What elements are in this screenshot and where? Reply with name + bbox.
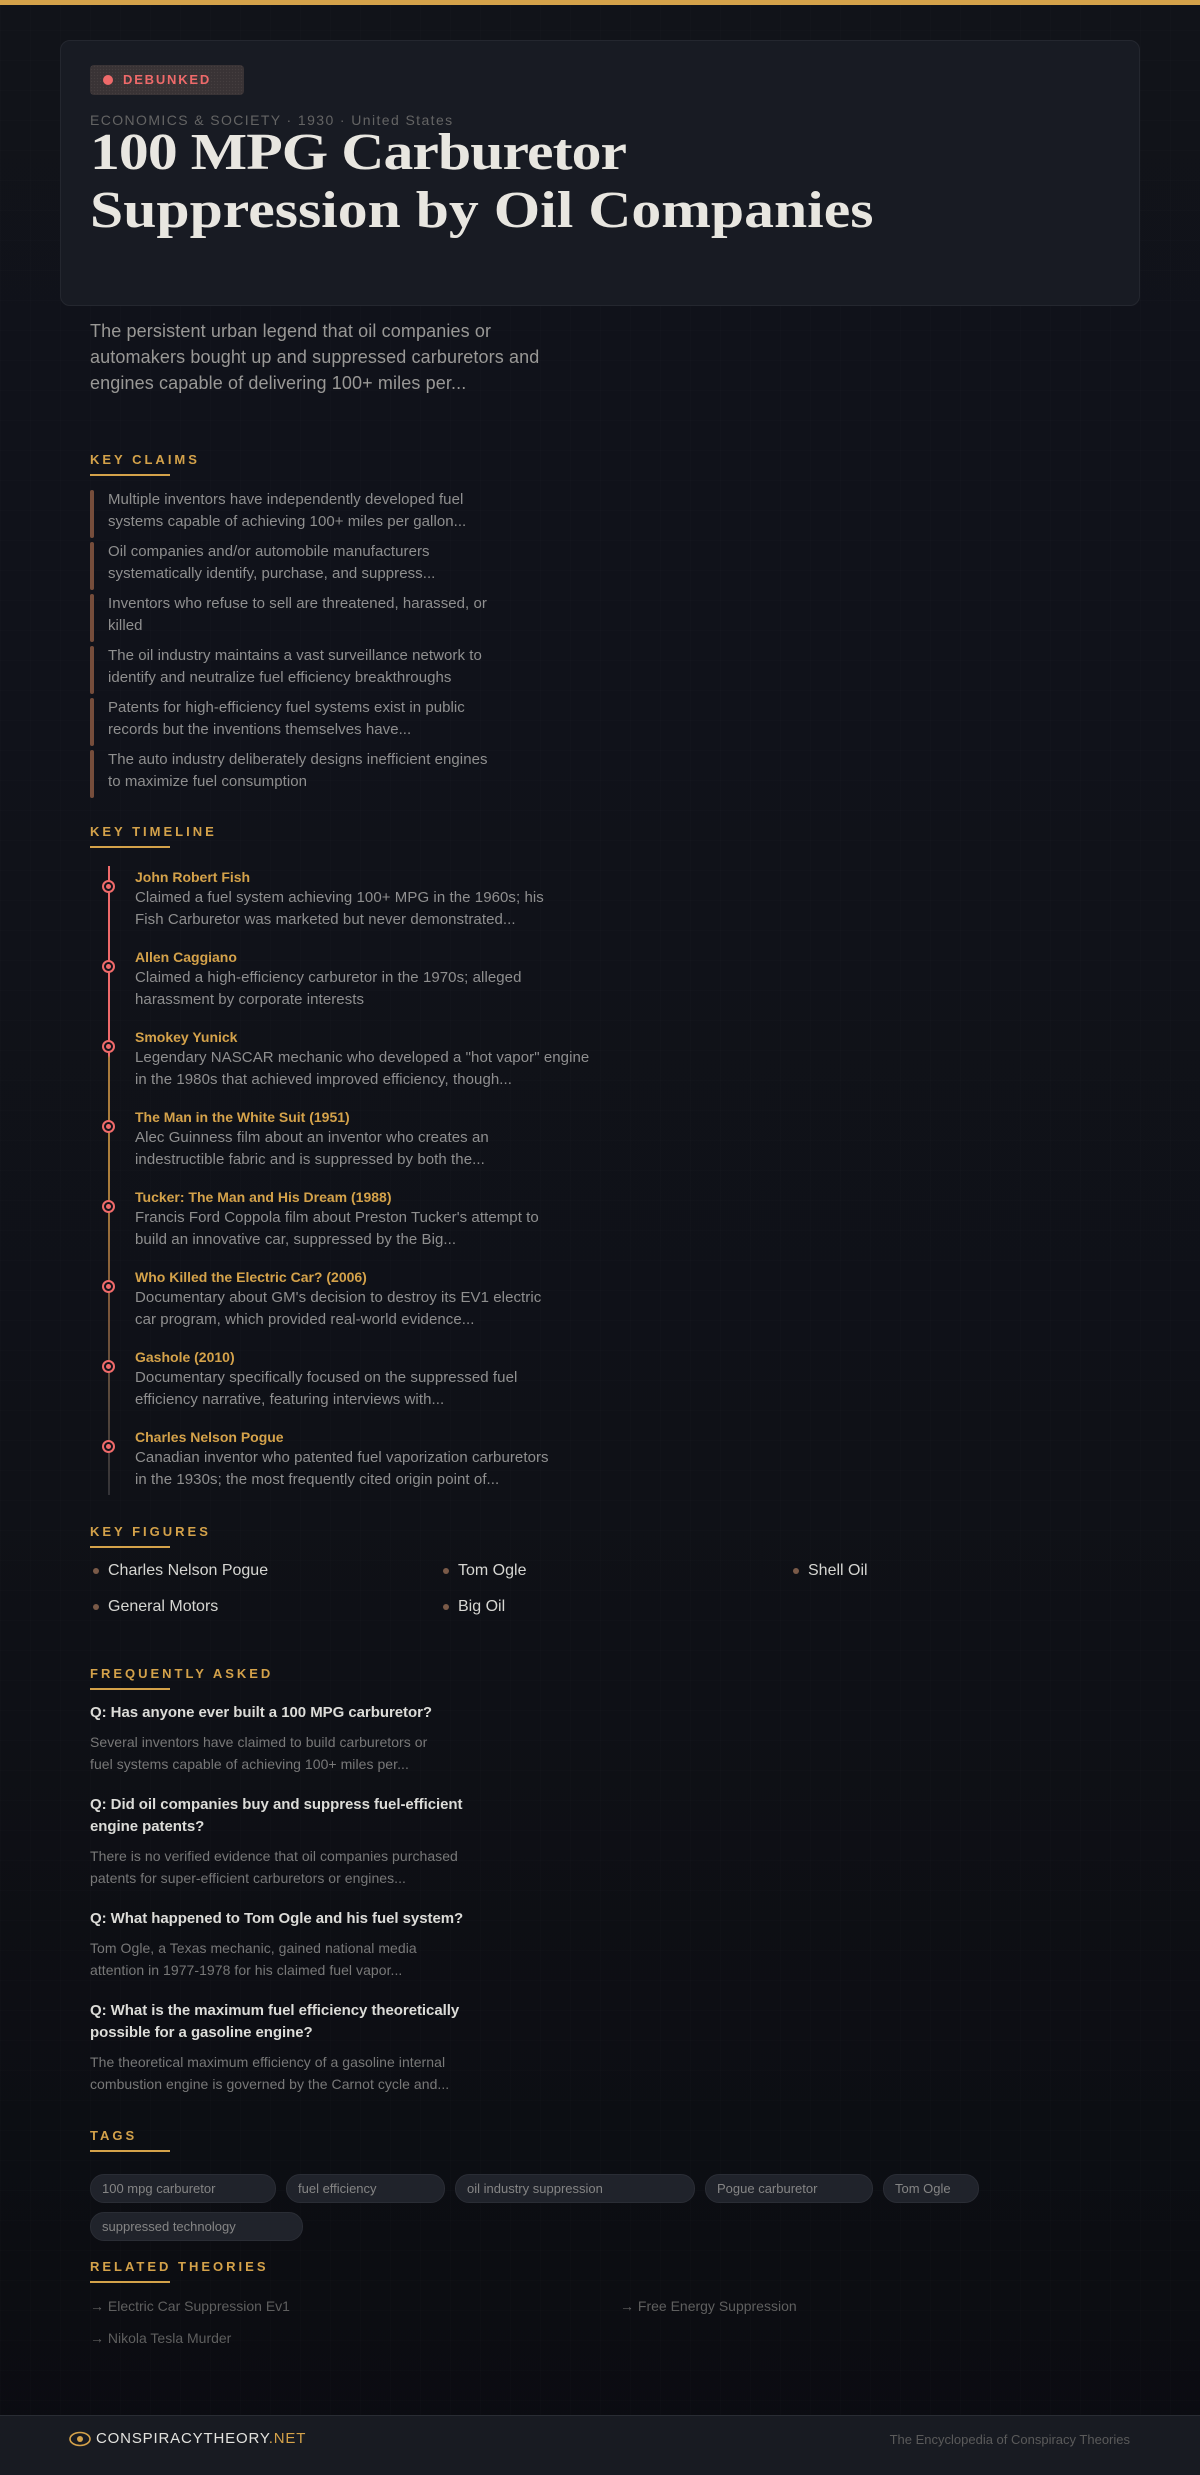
- FAQ 2: Q: Did oil companies buy and suppress fuel-efficient: [90, 1796, 462, 1813]
- claim 5: records but the inventions themselves have...: [108, 721, 411, 738]
- FAQ 3: Tom Ogle, a Texas mechanic, gained national media: [90, 1940, 417, 1956]
- FAQ 4: combustion engine is governed by the Carnot cycle and...: [90, 2076, 449, 2092]
- claim 6: [90, 750, 488, 798]
- lead summary: automakers bought up and suppressed carburetors and: [90, 347, 539, 367]
- icon: status dot: [103, 75, 113, 85]
- FAQ 1: fuel systems capable of achieving 100+ miles per...: [90, 1756, 409, 1772]
- heading: key figures: KEY FIGURES: [90, 1524, 211, 1539]
- event: The Man in the White Suit: [102, 1109, 489, 1168]
- claim 1: Multiple inventors have independently developed fuel: [108, 491, 463, 508]
- FAQ 1: Several inventors have claimed to build carburetors or: [90, 1734, 427, 1750]
- event: Charles Nelson Pogue: [102, 1429, 549, 1488]
- FAQ 2: There is no verified evidence that oil companies purchased: [90, 1848, 458, 1864]
- lead summary: engines capable of delivering 100+ miles per...: [90, 373, 466, 393]
- event: Who Killed the Electric Car: Documentary about GM's decision to destroy its EV1 electric: [135, 1289, 541, 1306]
- category and date line: ECONOMICS & SOCIETY · 1930 · United States: [90, 112, 454, 128]
- event: The Man in the White Suit: Alec Guinness film about an inventor who creates an: [135, 1129, 489, 1146]
- claim 4: identify and neutralize fuel efficiency breakthroughs: [108, 669, 451, 686]
- FAQ 3: [90, 1910, 463, 1978]
- panel: related theories: [90, 2298, 797, 2346]
- top accent bar: [0, 0, 1200, 5]
- tag: [286, 2174, 445, 2203]
- status badge: debunked: [90, 65, 244, 95]
- FAQ 1: [90, 1704, 432, 1772]
- claim 5: [90, 698, 465, 746]
- FAQ 3: attention in 1977-1978 for his claimed fuel vapor...: [90, 1962, 402, 1978]
- panel: key figures: [93, 1562, 868, 1615]
- tag: [90, 2174, 276, 2203]
- event: Tucker: Tucker: The Man and His Dream (1988): [135, 1189, 391, 1205]
- tag: Tom Ogle: [895, 2181, 951, 2196]
- claim 1: systems capable of achieving 100+ miles per gallon...: [108, 513, 466, 530]
- footer tagline: The Encyclopedia of Conspiracy Theories: [890, 2432, 1130, 2447]
- heading: frequently asked: FREQUENTLY ASKED: [90, 1666, 273, 1681]
- icon: eye logo: [69, 2432, 91, 2446]
- panel: key claims list: [90, 490, 488, 798]
- event: Smokey Yunick: in the 1980s that achieved improved efficiency, though...: [135, 1071, 512, 1088]
- heading: key timeline: KEY TIMELINE: [90, 824, 217, 839]
- event: The Man in the White Suit: The Man in the White Suit (1951): [135, 1109, 350, 1125]
- event: Allen Caggiano: Allen Caggiano: [135, 949, 237, 965]
- event: Allen Caggiano: Claimed a high-efficiency carburetor in the 1970s; alleged: [135, 969, 522, 986]
- FAQ 2: engine patents?: [90, 1818, 204, 1835]
- claim 2: [90, 542, 435, 590]
- tag: [455, 2174, 695, 2203]
- event: Gashole: Documentary specifically focused on the suppressed fuel: [135, 1369, 517, 1386]
- claim 3: killed: [108, 617, 142, 634]
- FAQ 4: possible for a gasoline engine?: [90, 2024, 313, 2041]
- claim 3: Inventors who refuse to sell are threatened, harassed, or: [108, 595, 487, 612]
- event: Charles Nelson Pogue: Charles Nelson Pogue: [135, 1429, 284, 1445]
- event: Tucker: [102, 1189, 539, 1248]
- panel: hero header: [60, 40, 1140, 306]
- FAQ 4: Q: What is the maximum fuel efficiency theoretically: [90, 2002, 459, 2019]
- related link: → Electric Car Suppression Ev1: [90, 2298, 290, 2314]
- tag: [90, 2212, 303, 2241]
- figure: Big Oil: Big Oil: [458, 1598, 505, 1615]
- title: [90, 124, 873, 239]
- tag: 100 mpg carburetor: [102, 2181, 215, 2196]
- FAQ 2: [90, 1796, 462, 1886]
- tag: [705, 2174, 873, 2203]
- claim 6: to maximize fuel consumption: [108, 773, 307, 790]
- event: Smokey Yunick: Legendary NASCAR mechanic who developed a "hot vapor" engine: [135, 1049, 589, 1066]
- tag: oil industry suppression: [467, 2181, 603, 2196]
- panel: footer: [0, 2415, 1200, 2475]
- event: John Robert Fish: Claimed a fuel system achieving 100+ MPG in the 1960s; his: [135, 889, 544, 906]
- FAQ 4: [90, 2002, 460, 2092]
- claim 2: Oil companies and/or automobile manufacturers: [108, 543, 430, 560]
- event: Allen Caggiano: harassment by corporate interests: [135, 991, 364, 1008]
- title: Suppression by Oil Companies: [90, 182, 873, 239]
- event: The Man in the White Suit: indestructible fabric and is suppressed by both the...: [135, 1151, 485, 1168]
- claim 4: The oil industry maintains a vast surveillance network to: [108, 647, 482, 664]
- event: Gashole: efficiency narrative, featuring interviews with...: [135, 1391, 444, 1408]
- lead summary: The persistent urban legend that oil companies or: [90, 321, 491, 341]
- title: 100 MPG Carburetor: [90, 124, 626, 181]
- event: John Robert Fish: John Robert Fish: [135, 869, 250, 885]
- event: Smokey Yunick: Smokey Yunick: [135, 1029, 237, 1045]
- figure: Tom Ogle: Tom Ogle: [458, 1562, 526, 1579]
- event: Charles Nelson Pogue: Canadian inventor who patented fuel vaporization carburetors: [135, 1449, 549, 1466]
- FAQ 2: patents for super-efficient carburetors or engines...: [90, 1870, 406, 1886]
- FAQ 4: The theoretical maximum efficiency of a gasoline internal: [90, 2054, 445, 2070]
- claim 3: [90, 594, 487, 642]
- logo wordmark: CONSPIRACYTHEORY.NET: [96, 2430, 306, 2447]
- event: Smokey Yunick: [102, 1029, 589, 1088]
- event: John Robert Fish: Fish Carburetor was marketed but never demonstrated...: [135, 911, 516, 928]
- panel: FAQ: [90, 1704, 463, 2092]
- event: John Robert Fish: [102, 869, 544, 928]
- related link: → Free Energy Suppression: [620, 2298, 797, 2314]
- heading: key claims: KEY CLAIMS: [90, 452, 200, 467]
- event: Who Killed the Electric Car: car program, which provided real-world evidence...: [135, 1311, 474, 1328]
- event: Gashole: [102, 1349, 517, 1408]
- claim 5: Patents for high-efficiency fuel systems exist in public: [108, 699, 465, 716]
- claim 6: The auto industry deliberately designs inefficient engines: [108, 751, 488, 768]
- event: Who Killed the Electric Car: [102, 1269, 541, 1328]
- FAQ 1: Q: Has anyone ever built a 100 MPG carburetor?: [90, 1704, 432, 1721]
- tag: suppressed technology: [102, 2219, 236, 2234]
- event: Tucker: Francis Ford Coppola film about Preston Tucker's attempt to: [135, 1209, 539, 1226]
- event: Allen Caggiano: [102, 949, 522, 1008]
- figure: Shell Oil: Shell Oil: [808, 1562, 868, 1579]
- claim 4: [90, 646, 482, 694]
- related link: → Nikola Tesla Murder: [90, 2330, 231, 2346]
- figure: Charles Nelson Pogue: Charles Nelson Pogue: [108, 1562, 268, 1579]
- tag: fuel efficiency: [298, 2181, 377, 2196]
- event: Charles Nelson Pogue: in the 1930s; the most frequently cited origin point of...: [135, 1471, 499, 1488]
- badge label: DEBUNKED: [123, 72, 211, 87]
- panel: timeline: [102, 866, 589, 1495]
- figure: General Motors: General Motors: [108, 1598, 218, 1615]
- event: Gashole: Gashole (2010): [135, 1349, 235, 1365]
- lead summary: [90, 321, 539, 393]
- heading: related theories: RELATED THEORIES: [90, 2259, 268, 2274]
- tag: Pogue carburetor: [717, 2181, 817, 2196]
- tag: [883, 2174, 979, 2203]
- timeline spine: [108, 866, 110, 1495]
- event: Who Killed the Electric Car: Who Killed the Electric Car? (2006): [135, 1269, 367, 1285]
- claim 1: [90, 490, 466, 538]
- claim 2: systematically identify, purchase, and suppress...: [108, 565, 435, 582]
- event: Tucker: build an innovative car, suppressed by the Big...: [135, 1231, 456, 1248]
- FAQ 3: Q: What happened to Tom Ogle and his fuel system?: [90, 1910, 463, 1927]
- panel: tags: [90, 2174, 979, 2241]
- heading: tags: TAGS: [90, 2128, 137, 2143]
